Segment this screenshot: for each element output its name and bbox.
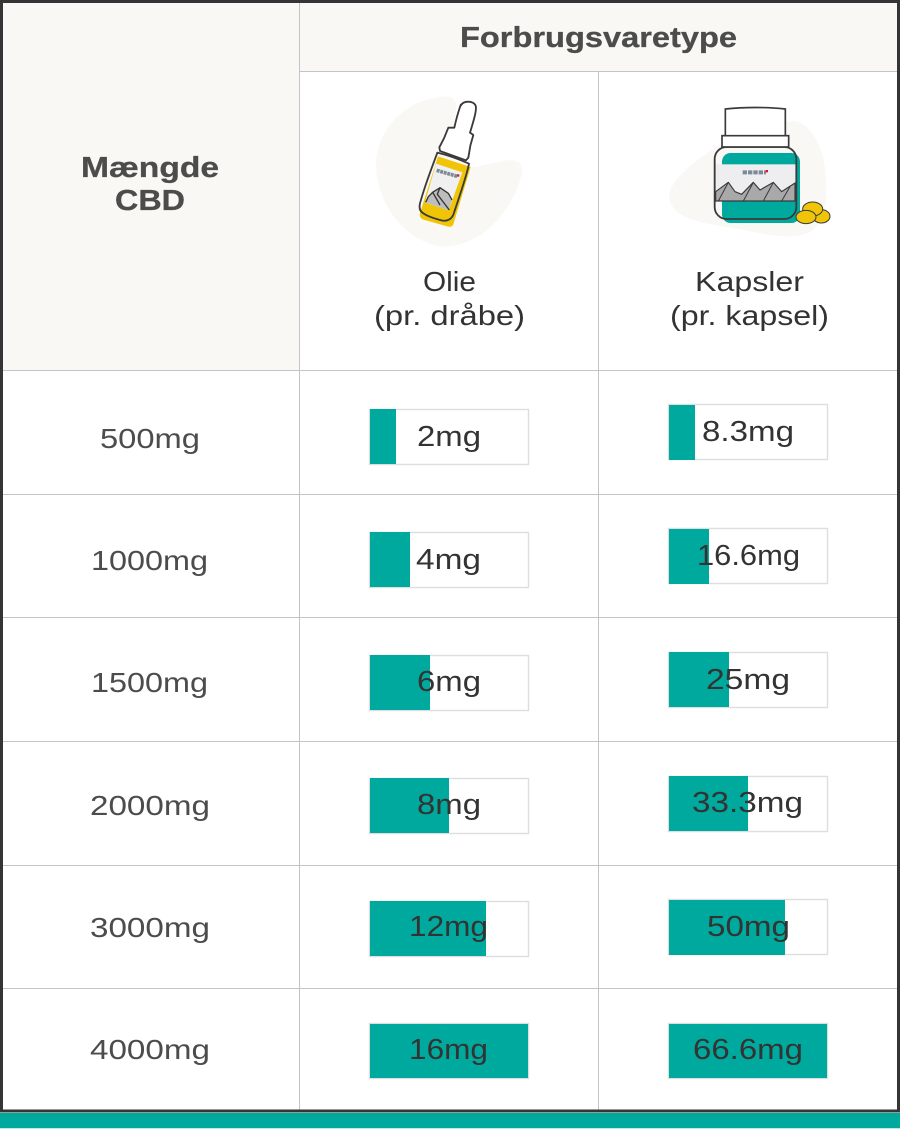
column label: Kapsler: (pr. kapsel): [670, 300, 829, 331]
bar: kapsler 1000mg: 16.6mg: [697, 540, 800, 572]
bar: olie 2000mg: 8mg: [417, 789, 481, 821]
bar: olie 500mg: [370, 409, 528, 464]
row label: 500mg: 500mg: [100, 423, 200, 454]
row label: 1500mg: 1500mg: [91, 667, 208, 698]
bar: olie 1000mg: 4mg: [416, 544, 481, 576]
bar: kapsler 1500mg: 25mg: [706, 664, 790, 696]
bar: kapsler 4000mg: [668, 1024, 828, 1078]
row label: 3000mg: 3000mg: [90, 912, 210, 943]
column label: Kapsler: [670, 266, 829, 331]
bar: olie 3000mg: 12mg: [409, 911, 488, 943]
bottom teal band: [0, 1113, 900, 1128]
bar: kapsler 500mg: [668, 404, 828, 460]
header cell: Forbrugsvaretype: [299, 3, 897, 71]
bar: olie 4000mg: [370, 1024, 528, 1078]
bar: olie 2000mg: [370, 778, 528, 834]
row label: 4000mg: 4000mg: [90, 1034, 210, 1065]
header cell: Mængde CBD: Mængde: [81, 152, 219, 184]
bar: kapsler 2000mg: 33.3mg: [692, 787, 803, 819]
bar: olie 1500mg: [370, 655, 528, 710]
row label: 1000mg: 1000mg: [91, 545, 208, 576]
bar: olie 1000mg: [370, 532, 528, 588]
row label: 2000mg: 2000mg: [90, 790, 210, 821]
column label: Kapsler: Kapsler: [695, 266, 804, 297]
bar: kapsler 3000mg: [668, 900, 828, 955]
column label: Olie: Olie: [423, 266, 476, 297]
header cell: Mængde CBD: CBD: [115, 185, 185, 217]
bar: kapsler 2000mg: [668, 776, 828, 832]
bar: olie 4000mg: 16mg: [409, 1034, 488, 1066]
bar: olie 500mg: 2mg: [417, 421, 481, 453]
icon: oil dropper bottle: [376, 97, 522, 246]
bar: kapsler 1500mg: [668, 652, 828, 708]
bar: kapsler 4000mg: 66.6mg: [693, 1034, 803, 1066]
bar: olie 1500mg: 6mg: [417, 666, 481, 698]
bar: kapsler 1000mg: [668, 528, 828, 584]
bar: kapsler 500mg: 8.3mg: [702, 416, 794, 448]
icon: capsule jar: [669, 107, 830, 236]
header cell: Mængde CBD: [3, 3, 299, 370]
header cell: Forbrugsvaretype: Forbrugsvaretype: [460, 22, 737, 54]
column label: Olie: [374, 266, 525, 331]
column label: Olie: (pr. dråbe): [374, 300, 525, 331]
bar: olie 3000mg: [370, 901, 528, 956]
bar: kapsler 3000mg: 50mg: [707, 911, 790, 943]
